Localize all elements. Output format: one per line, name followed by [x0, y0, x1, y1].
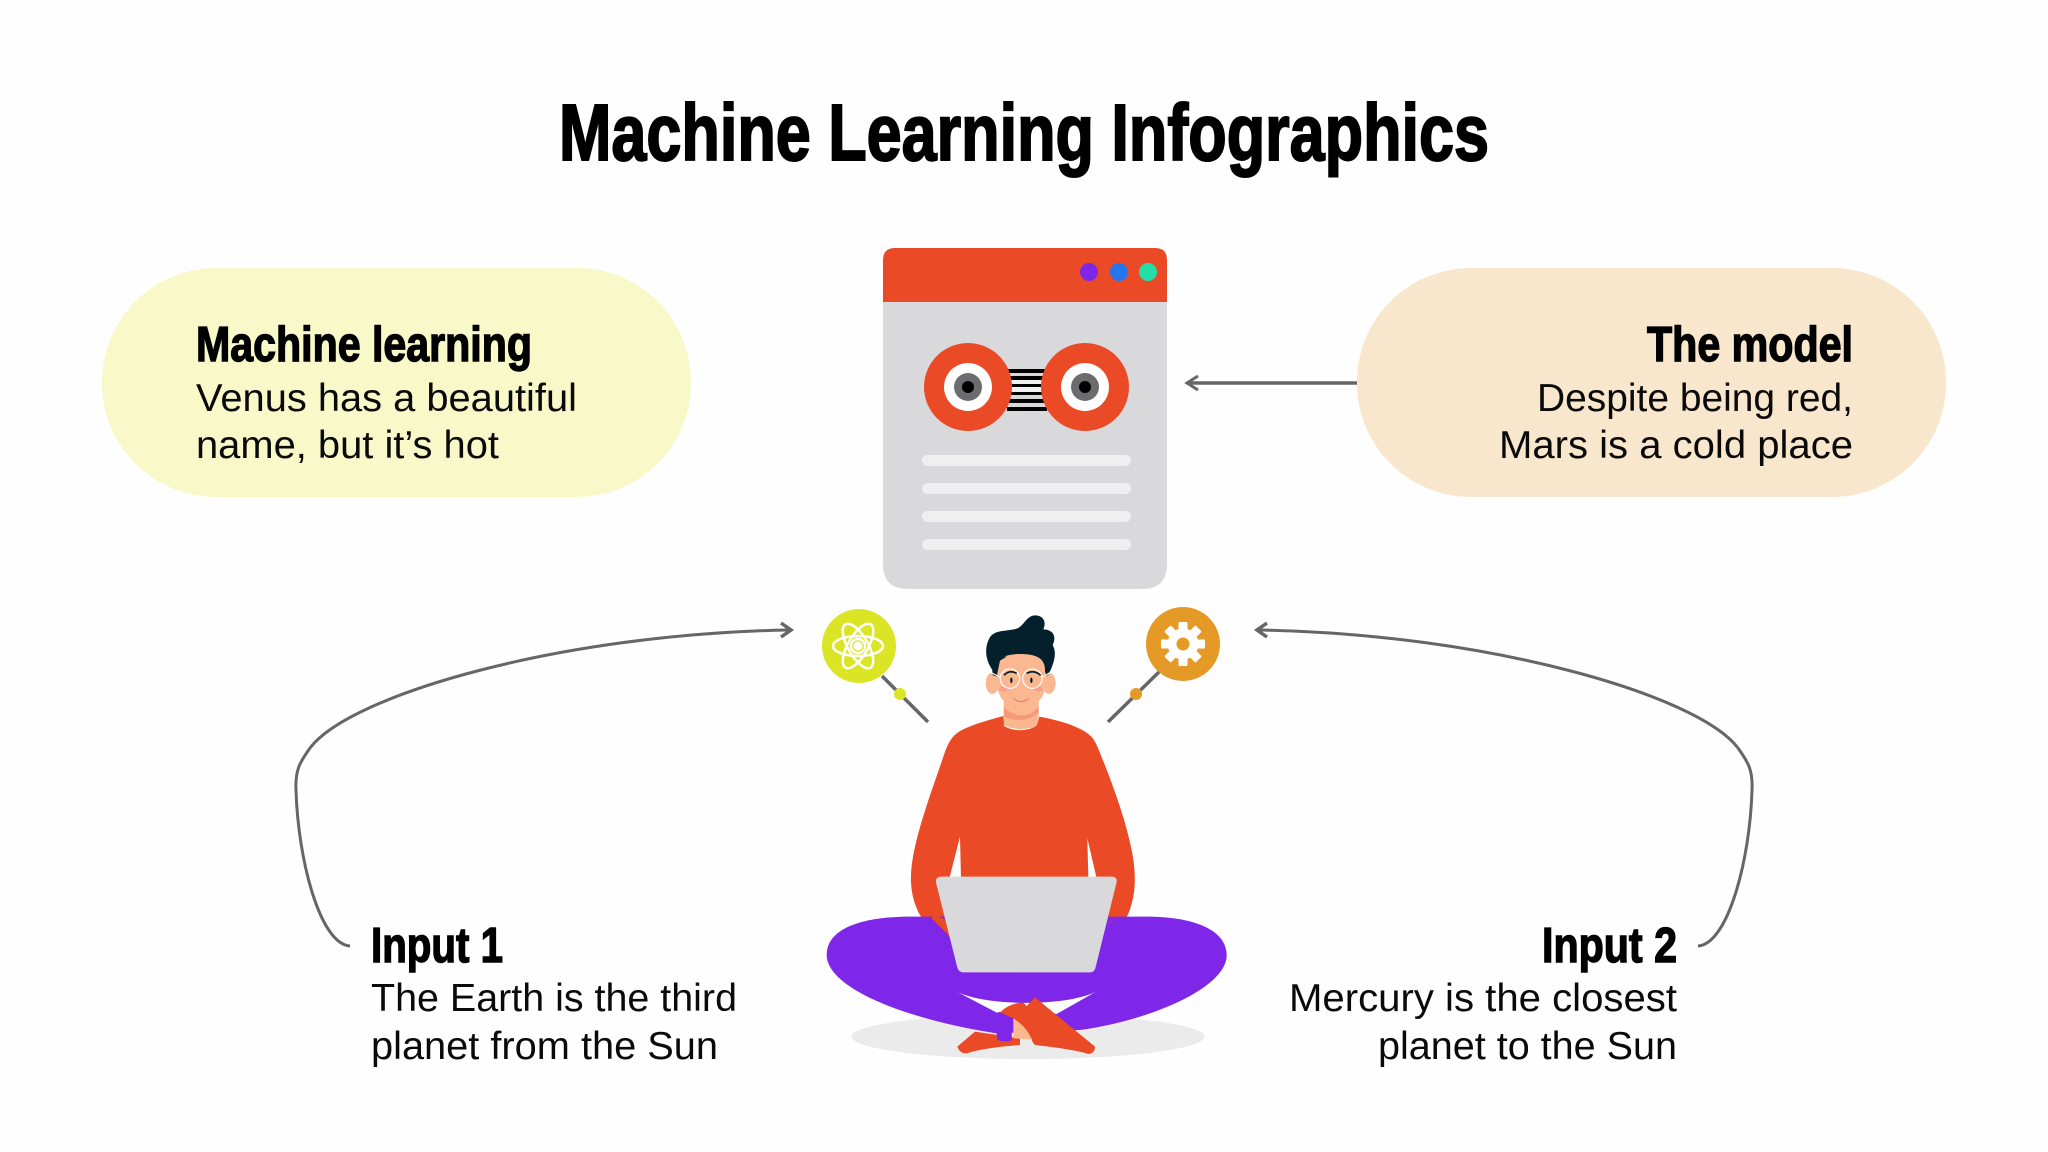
heading: machine learning: Machine learning — [196, 318, 532, 372]
sleeve over legs — [932, 915, 957, 937]
text block: input 1: Input 1 — [371, 919, 503, 973]
heading: the model: The model — [1647, 318, 1853, 372]
text block: the model description — [1499, 377, 1853, 467]
arrow: model to window — [1187, 376, 1357, 390]
text block: input 2: Input 2 — [1542, 919, 1677, 973]
crescent gap — [957, 992, 1096, 1014]
icon: atom — [822, 609, 928, 722]
text block: input 1: The Earth is the third — [371, 977, 737, 1020]
laptop — [936, 877, 1117, 972]
text block: the model description: Mars is a cold place — [1499, 424, 1853, 467]
text block: the model description: Despite being red, — [1537, 377, 1853, 420]
neck shadow — [1004, 707, 1039, 720]
eyes and brows — [1004, 672, 1041, 683]
icon: gear — [1108, 607, 1220, 722]
smile — [1013, 698, 1029, 702]
arrow: input 1 curve — [296, 623, 791, 946]
illustration: person with laptop — [827, 615, 1227, 1059]
sweater gaps — [949, 837, 1097, 878]
text block: input 2: planet to the Sun — [1378, 1025, 1677, 1068]
crossed feet — [957, 997, 1095, 1054]
title: Machine Learning Infographics — [559, 88, 1489, 177]
text block: input 2 — [1289, 919, 1677, 1068]
arrow: input 2 curve — [1257, 623, 1752, 946]
sweater — [911, 716, 1135, 943]
blush — [999, 686, 1043, 692]
text block: machine learning description: Venus has a beautiful — [196, 377, 577, 420]
text block: machine learning description — [196, 377, 577, 467]
text block: input 1: planet from the Sun — [371, 1025, 718, 1068]
hair fringe — [992, 656, 1049, 677]
glasses — [991, 669, 1050, 688]
text block: machine learning description: name, but it’s hot — [196, 424, 499, 467]
hair — [986, 615, 1055, 675]
face — [997, 654, 1045, 709]
text block: input 1 — [371, 919, 737, 1068]
text block: input 2: Mercury is the closest — [1289, 977, 1677, 1020]
panel: machine learning — [102, 268, 691, 497]
panel: the model — [1357, 268, 1946, 497]
ears and neck — [986, 673, 1056, 729]
legs — [827, 917, 1227, 1033]
icon: browser window with robot eyes — [883, 248, 1167, 589]
floor shadow — [851, 1014, 1205, 1059]
